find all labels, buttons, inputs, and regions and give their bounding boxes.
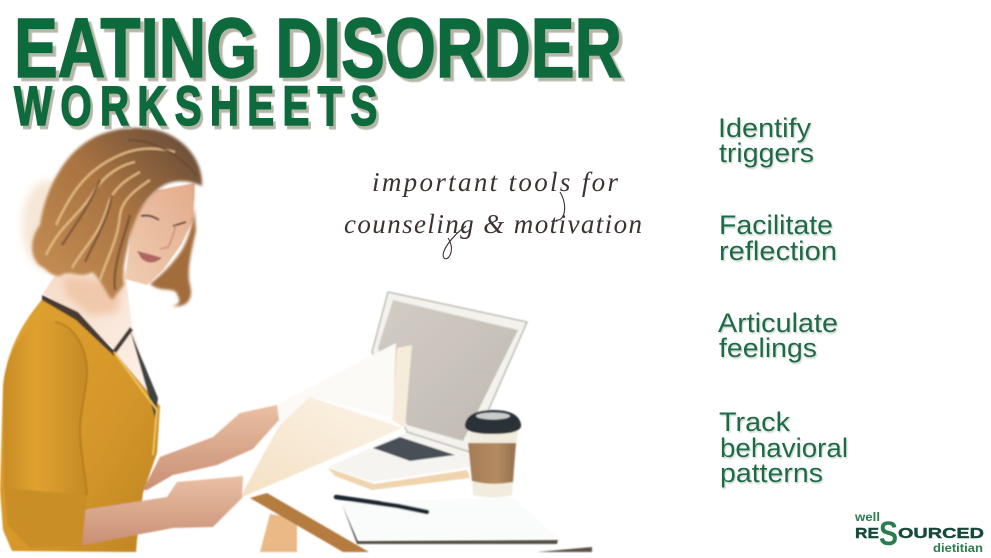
text: facilitate reflection: Facilitate <box>719 210 833 240</box>
icon: table corner <box>537 547 592 552</box>
text: articulate feelings: feelings <box>719 333 817 363</box>
logo: Well Resourced Dietitian <box>854 510 984 555</box>
icon: near arm and hand <box>83 476 243 545</box>
icon: neck and chest <box>43 270 158 420</box>
text: articulate feelings <box>718 308 838 363</box>
photo: woman reading <box>0 128 279 552</box>
icon: table edge <box>250 493 369 552</box>
logo: Well Resourced Dietitian: S <box>879 515 898 553</box>
photo: desk with laptop, folder and coffee <box>240 292 592 552</box>
icon: laptop base <box>328 432 472 482</box>
list: worksheet benefits <box>718 113 848 488</box>
text: articulate feelings: Articulate <box>718 308 838 338</box>
flourish: script swashes <box>443 192 565 259</box>
icon: sleeve cuff <box>4 488 87 548</box>
icon: manila folder <box>240 397 403 498</box>
text: track behavioral patterns: patterns <box>720 458 823 488</box>
logo: Well Resourced Dietitian: dietitian <box>933 543 983 555</box>
logo: Well Resourced Dietitian: well <box>854 510 880 524</box>
text: identify triggers: triggers <box>719 138 814 168</box>
title: Eating Disorder: EATING DISORDER <box>14 1 622 95</box>
icon: neck shadow <box>62 276 122 316</box>
icon: pen <box>336 497 427 512</box>
logo: Well Resourced Dietitian: RE <box>855 525 879 542</box>
subtitle: Worksheets: WORKSHEETS <box>14 76 386 138</box>
icon: laptop screen <box>372 292 527 452</box>
text: facilitate reflection <box>719 210 837 266</box>
text: track behavioral patterns <box>719 407 848 488</box>
icon: laptop keyboard <box>373 437 455 461</box>
icon: notebook <box>342 498 558 544</box>
icon: hair <box>32 128 202 306</box>
logo: Well Resourced Dietitian: OURCED <box>898 525 984 542</box>
icon: sheet of paper <box>270 343 396 425</box>
text: track behavioral patterns: Track <box>719 407 791 437</box>
text: identify triggers <box>718 113 814 168</box>
tagline: script text: important tools for <box>372 167 618 197</box>
icon: far arm and hand <box>143 405 279 490</box>
icon: coffee cup <box>465 410 521 498</box>
text: identify triggers: Identify <box>718 113 812 143</box>
text: facilitate reflection: reflection <box>719 236 837 266</box>
icon: table leg <box>260 514 297 552</box>
tagline: script text <box>344 167 642 259</box>
icon: face <box>125 183 195 285</box>
icon: back folder flap <box>392 345 412 428</box>
icon: cardigan <box>0 295 160 552</box>
tagline: script text: counseling & motivation <box>344 209 642 239</box>
text: track behavioral patterns: behavioral <box>720 433 848 463</box>
icon: table top shadow <box>328 468 470 490</box>
icon: hair glow <box>22 180 74 270</box>
